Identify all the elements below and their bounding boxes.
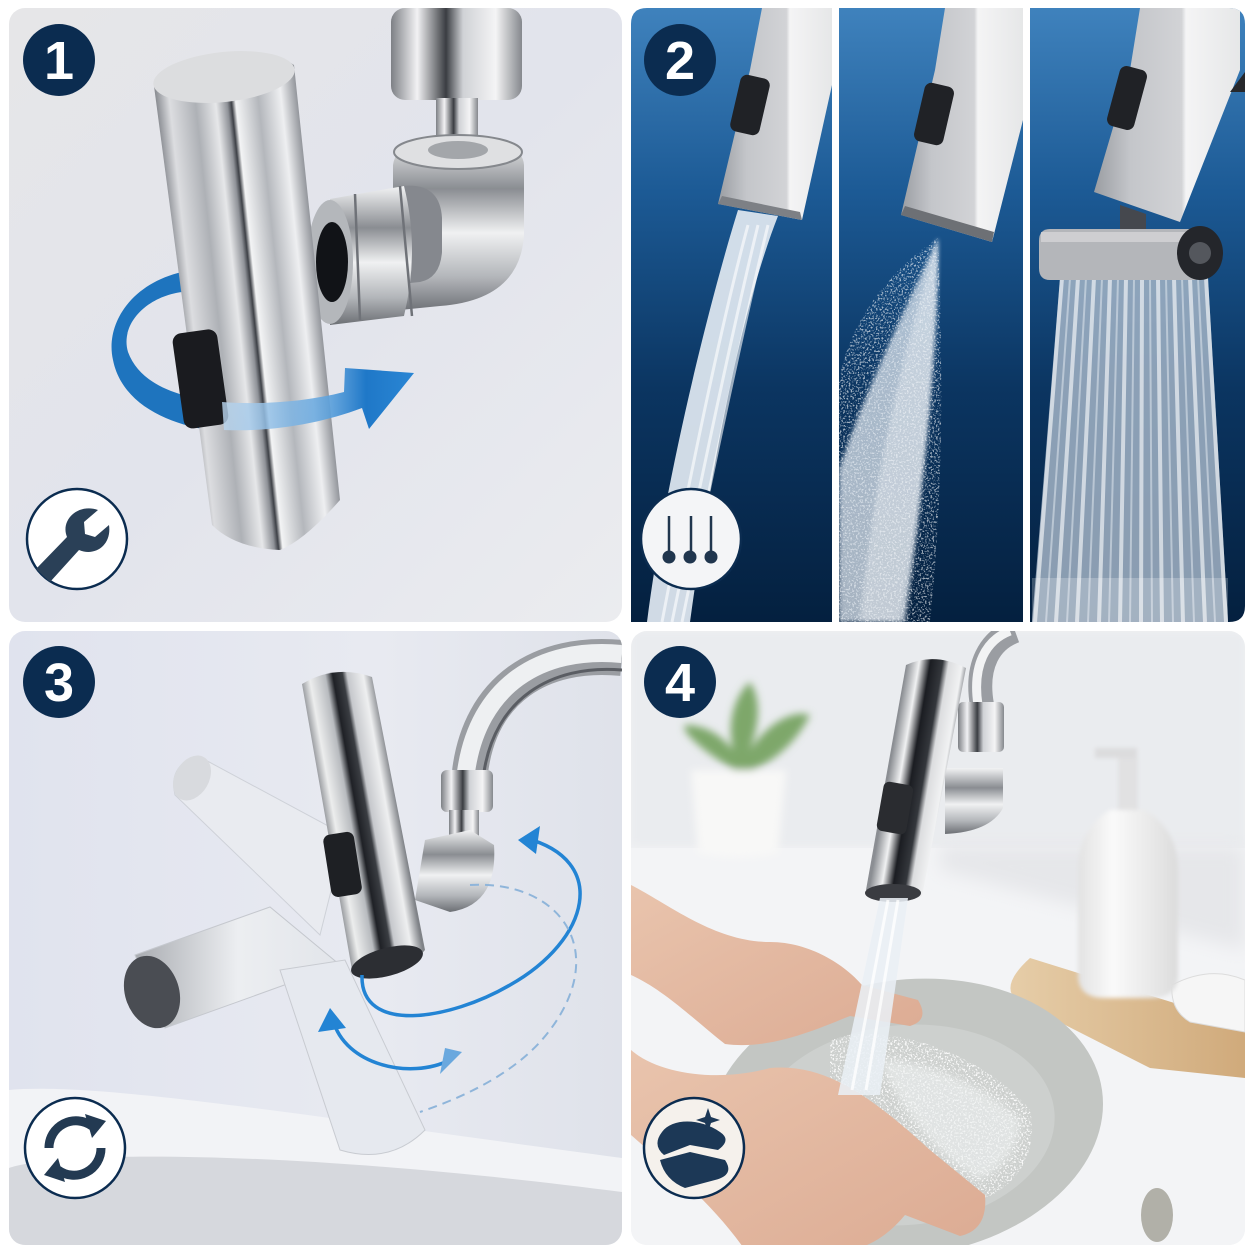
panel 2b: spray mode (839, 8, 1023, 622)
faucet head (151, 45, 340, 550)
arrow front overlay (222, 368, 414, 430)
ghost nozzle (124, 956, 180, 1028)
water stream (647, 210, 778, 622)
badge 1: 1 (44, 31, 74, 91)
counter (631, 848, 1245, 1245)
upper hand (631, 885, 922, 1045)
blue rotation arrow behind faucet (112, 272, 200, 428)
water stream (838, 898, 908, 1095)
sink hole (1141, 1188, 1173, 1242)
icon: wrench (27, 489, 127, 589)
panel 2c: waterfall mode (1030, 8, 1245, 622)
dashed orbit (420, 885, 576, 1112)
motion arrows (333, 838, 580, 1069)
panel 3: multi-angle adjust (9, 631, 622, 1245)
faucet head (901, 8, 1023, 242)
button (172, 328, 229, 430)
badge 4: 4 (665, 653, 695, 713)
sink (9, 1089, 622, 1245)
icon: rotate (25, 1098, 125, 1198)
spray cone (839, 238, 941, 622)
faucet head (865, 659, 966, 902)
faucet head (302, 672, 426, 985)
badge 2: 2 (665, 31, 695, 91)
plate (691, 954, 1121, 1254)
badge 2 (644, 24, 716, 96)
icon: spray modes (641, 489, 741, 589)
badge 4 (644, 646, 716, 718)
wooden tray (1010, 958, 1245, 1078)
faucet head (718, 8, 832, 220)
waterfall head (1039, 229, 1196, 280)
icon: elbow joint and aerator connection (307, 8, 524, 325)
panel 2a: stream mode (631, 8, 832, 622)
soap bottle (1078, 748, 1178, 998)
plant (684, 682, 810, 858)
panel 1: swivel rotation (9, 8, 622, 622)
badge 1 (23, 24, 95, 96)
ghost faucet positions (135, 749, 425, 1154)
arrowheads (318, 826, 540, 1074)
faucet head (1094, 8, 1240, 222)
badge 3 (23, 646, 95, 718)
spout (977, 631, 1015, 705)
aerator collar and elbow (415, 770, 494, 912)
lower hand (631, 1050, 985, 1250)
icon: clean dish (644, 1098, 744, 1198)
spout (466, 653, 622, 772)
waterfall (1032, 278, 1228, 622)
small dish on tray (1172, 974, 1245, 1032)
badge 3: 3 (44, 653, 74, 713)
panel 4: washing dishes (631, 631, 1245, 1254)
collar and elbow (945, 702, 1004, 834)
